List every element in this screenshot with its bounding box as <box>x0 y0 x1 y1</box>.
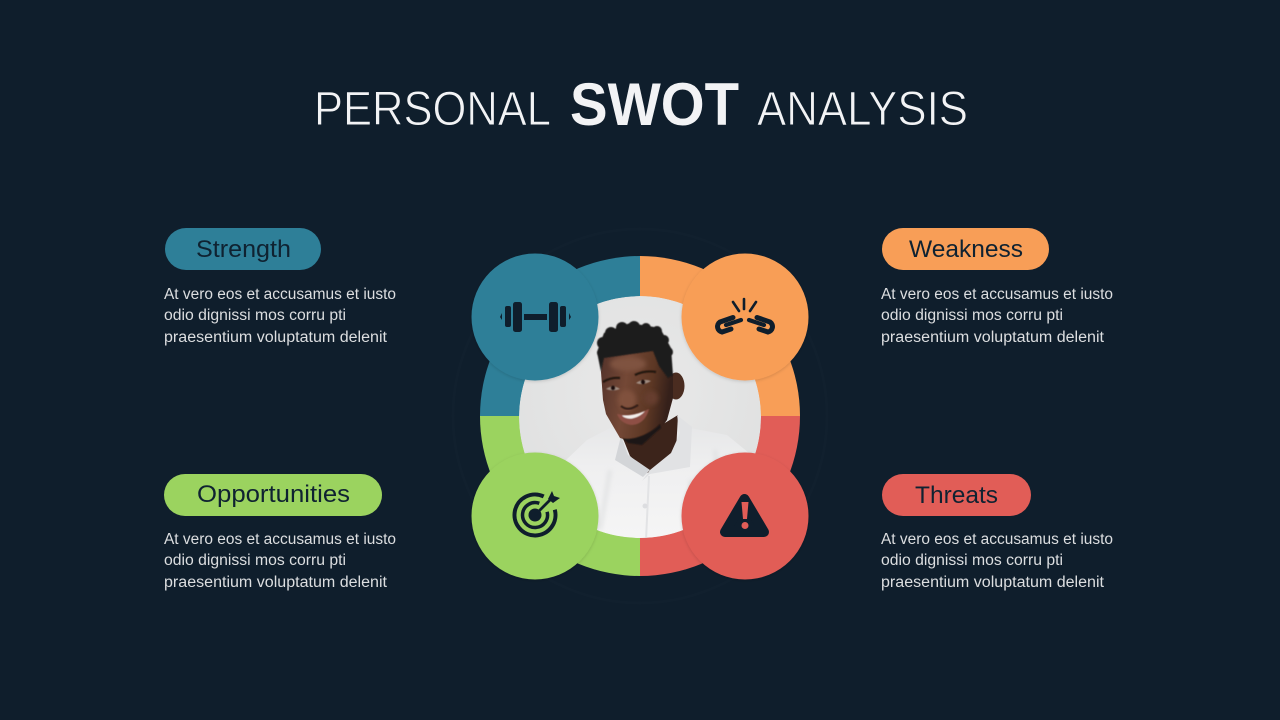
icon: broken chain <box>718 299 772 332</box>
threats label pill: Threats <box>915 482 998 509</box>
strength description <box>164 286 396 346</box>
icon: target <box>514 491 560 535</box>
title: PERSONAL <box>314 83 551 136</box>
neck <box>622 415 678 473</box>
weakness description: odio dignissi mos corru pti <box>881 307 1063 324</box>
opportunities description: praesentium voluptatum delenit <box>164 574 388 591</box>
panel: opportunities <box>164 474 396 591</box>
ear <box>672 372 684 400</box>
ring segment: opportunities <box>480 416 640 576</box>
weakness label pill: Weakness <box>909 236 1023 263</box>
hair <box>597 321 673 378</box>
portrait photo <box>519 296 775 545</box>
weakness label pill <box>882 228 1049 270</box>
ring segment: strength <box>480 256 640 416</box>
strength label pill <box>165 228 321 270</box>
smile <box>617 409 649 425</box>
panel: threats <box>881 474 1113 591</box>
eyes <box>603 371 656 390</box>
nose <box>621 405 638 409</box>
opportunities description <box>164 531 396 591</box>
strength description: At vero eos et accusamus et iusto <box>164 286 396 303</box>
ring segment: weakness <box>640 256 800 416</box>
strength label pill: Strength <box>196 236 291 263</box>
threats description: praesentium voluptatum delenit <box>881 574 1105 591</box>
weakness description <box>881 286 1113 346</box>
panel: strength <box>164 228 396 346</box>
face <box>601 345 673 444</box>
title <box>314 71 968 138</box>
strength description: odio dignissi mos corru pti <box>164 307 346 324</box>
strength description: praesentium voluptatum delenit <box>164 329 388 346</box>
icon circle: threats <box>682 452 808 580</box>
beard <box>622 424 661 445</box>
weakness description: praesentium voluptatum delenit <box>881 329 1105 346</box>
ring segment: threats <box>640 416 800 576</box>
title: SWOT <box>570 71 739 138</box>
title: ANALYSIS <box>757 83 968 136</box>
weakness description: At vero eos et accusamus et iusto <box>881 286 1113 303</box>
threats description: At vero eos et accusamus et iusto <box>881 531 1113 548</box>
threats label pill <box>882 474 1031 516</box>
icon circle: weakness <box>682 254 808 380</box>
icon: warning triangle <box>725 499 764 532</box>
threats description <box>881 531 1113 591</box>
collar <box>615 436 650 477</box>
shirt <box>566 441 748 538</box>
icon circle: strength <box>472 254 598 380</box>
icon circle: opportunities <box>472 452 598 580</box>
opportunities label pill <box>164 474 382 516</box>
threats description: odio dignissi mos corru pti <box>881 552 1063 569</box>
icon: dumbbell <box>500 302 571 332</box>
central SWOT diagram <box>472 254 808 580</box>
opportunities description: At vero eos et accusamus et iusto <box>164 531 396 548</box>
skin highlights <box>610 357 658 410</box>
opportunities description: odio dignissi mos corru pti <box>164 552 346 569</box>
opportunities label pill: Opportunities <box>197 481 350 508</box>
panel: weakness <box>881 228 1113 346</box>
